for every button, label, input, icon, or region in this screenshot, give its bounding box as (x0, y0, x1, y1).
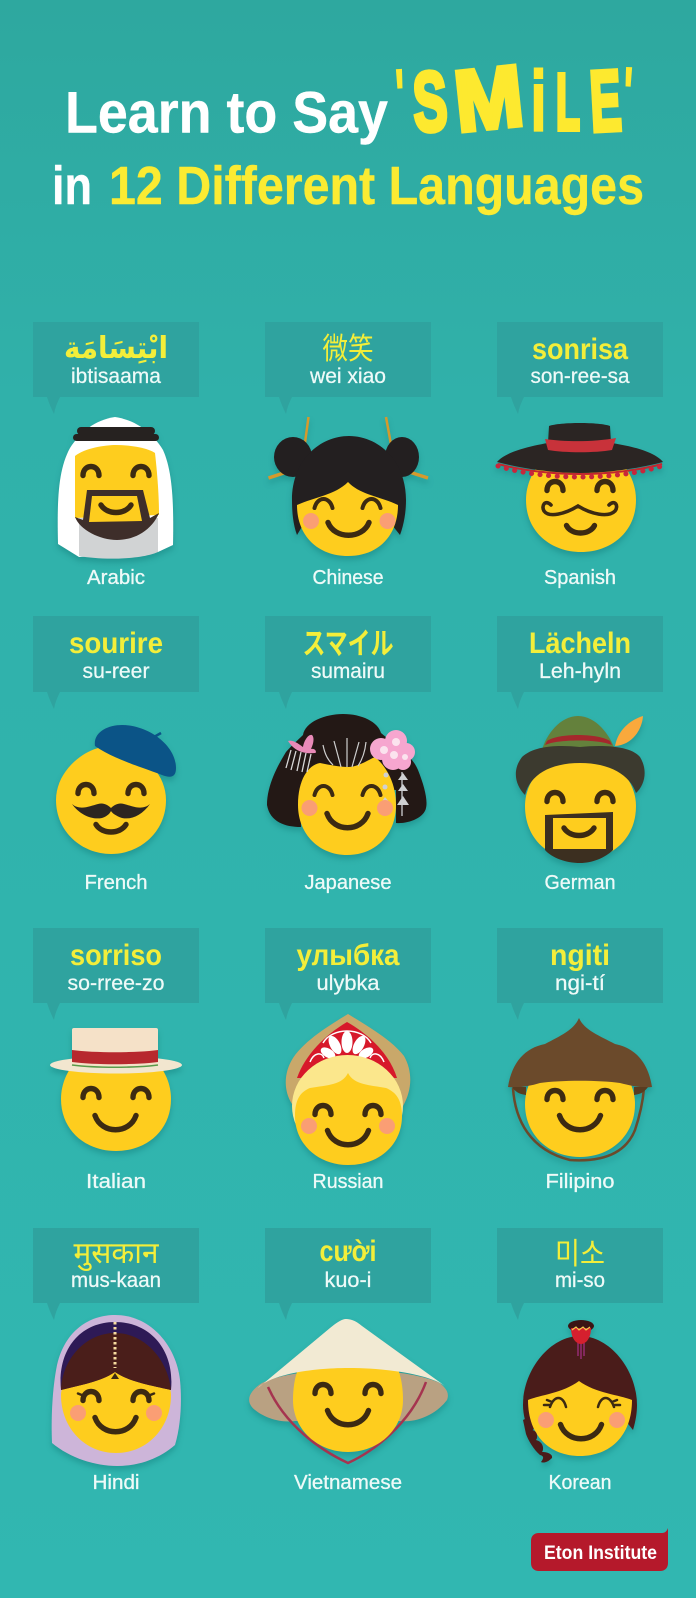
word: मुसकान (74, 1237, 160, 1272)
language label: Chinese (312, 567, 384, 589)
title line one: Learn to Say (65, 80, 388, 146)
word: улыбка (296, 939, 400, 972)
speech bubble (265, 928, 431, 1020)
pronunciation: mi-so (555, 1269, 605, 1292)
panel: Vietnamese (249, 1228, 448, 1494)
language label: Russian (312, 1171, 384, 1193)
speech bubble (33, 928, 199, 1020)
title (52, 48, 644, 216)
icon: Russian face (286, 1014, 410, 1165)
pronunciation: su-reer (82, 660, 150, 683)
word: スマイル (302, 628, 394, 661)
panel: Korean (497, 1228, 663, 1494)
icon: French face (56, 725, 176, 854)
speech bubble (265, 322, 431, 414)
word: 미소 (555, 1238, 605, 1271)
language label: French (84, 872, 148, 894)
word: sonrisa (532, 333, 628, 366)
pronunciation: Leh-hyln (539, 660, 621, 683)
logo: Eton Institute (531, 1528, 668, 1571)
panel: Spanish (497, 322, 663, 589)
speech bubble (497, 322, 663, 414)
language label: Hindi (92, 1472, 140, 1494)
SMILE headline word (394, 48, 634, 150)
pronunciation: kuo-i (324, 1269, 372, 1292)
SMILE headline word: M (450, 48, 528, 150)
title: 12 Different Languages (109, 156, 644, 216)
language label: Arabic (87, 567, 145, 589)
SMILE headline word: E (588, 53, 624, 150)
icon: Japanese face (267, 714, 427, 855)
speech bubble (497, 616, 663, 709)
word: 微笑 (322, 333, 374, 366)
language label: Vietnamese (294, 1472, 402, 1494)
panel: Arabic (33, 322, 199, 589)
SMILE headline word: ' (394, 56, 406, 130)
icon: Filipino face (508, 1018, 652, 1160)
pronunciation: son-ree-sa (530, 365, 630, 388)
icon: Spanish face (497, 423, 663, 552)
icon: Arabic face (58, 417, 173, 559)
SMILE headline word: i (531, 54, 546, 148)
language label: Italian (86, 1171, 146, 1193)
icon: Korean face (523, 1320, 637, 1463)
word: sourire (69, 627, 163, 660)
panel: Filipino (497, 928, 663, 1193)
speech bubble (33, 1228, 199, 1320)
speech bubble (33, 616, 199, 709)
language label: Japanese (304, 872, 392, 894)
speech bubble (33, 322, 199, 414)
speech bubble (497, 1228, 663, 1320)
icon: Hindi face (52, 1315, 181, 1466)
language label: Filipino (546, 1171, 614, 1193)
icon: Vietnamese face (249, 1319, 448, 1463)
speech bubble (265, 1228, 431, 1320)
panel: German (497, 616, 663, 894)
pronunciation: so-rree-zo (68, 972, 164, 995)
logo: Eton Institute: Eton Institute (544, 1543, 657, 1564)
panel: Italian (33, 928, 199, 1193)
icon: Italian face (50, 1028, 182, 1151)
panel: Chinese (265, 322, 431, 589)
icon: Chinese face (268, 417, 428, 556)
language label: Spanish (544, 567, 616, 589)
language label: German (544, 872, 616, 894)
pronunciation: mus-kaan (71, 1269, 161, 1292)
title line two: in (52, 156, 92, 216)
word: Lächeln (529, 627, 631, 660)
word: cười (320, 1235, 376, 1268)
speech bubble (265, 616, 431, 709)
SMILE headline word: L (556, 58, 580, 146)
SMILE headline word: S (411, 54, 450, 149)
panel: Hindi (33, 1228, 199, 1494)
word: sorriso (70, 939, 162, 972)
panel: Japanese (265, 616, 431, 894)
panel: French (33, 616, 199, 894)
SMILE headline word: ' (622, 54, 634, 128)
pronunciation: ngi-tí (555, 972, 605, 995)
icon: German face (516, 716, 645, 863)
speech bubble (497, 928, 663, 1020)
word: ابْتِسَامَة (64, 331, 168, 366)
pronunciation: sumairu (311, 660, 385, 683)
pronunciation: wei xiao (309, 365, 386, 388)
panel: Russian (265, 928, 431, 1193)
language label: Korean (548, 1472, 612, 1494)
word: ngiti (550, 939, 610, 972)
pronunciation: ulybka (316, 972, 380, 995)
pronunciation: ibtisaama (71, 365, 161, 388)
